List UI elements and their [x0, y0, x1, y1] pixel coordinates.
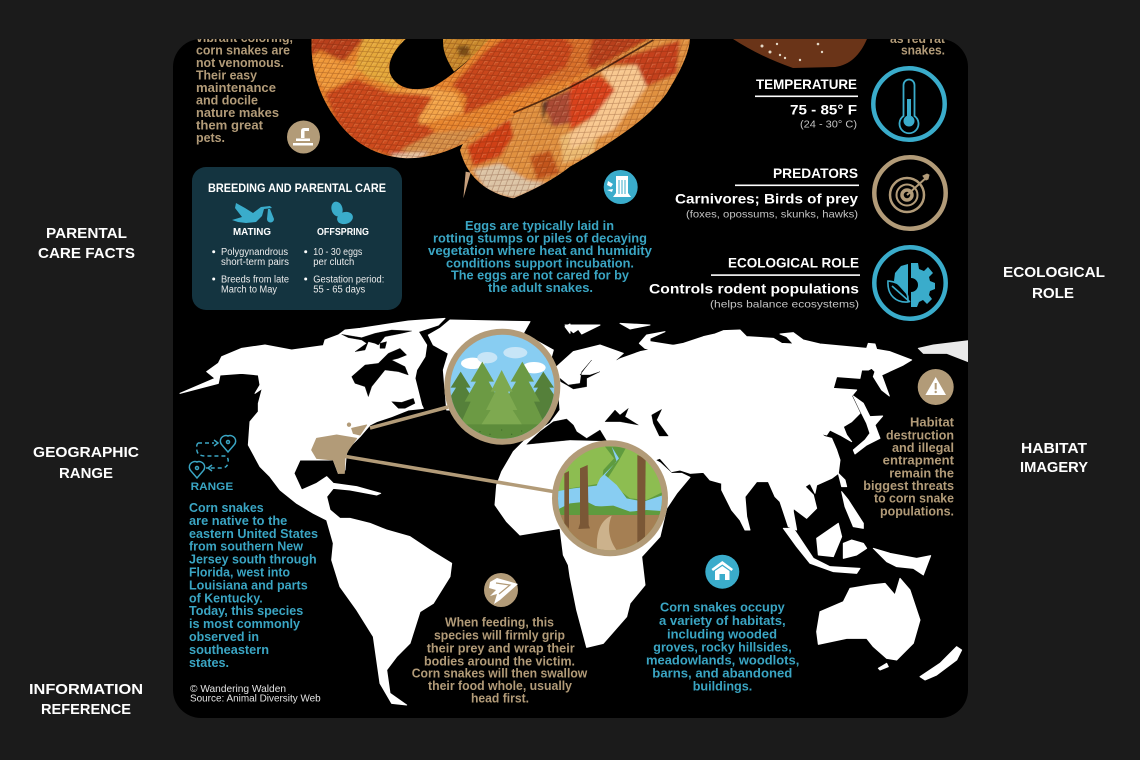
text block: feeding: When feeding, this [445, 615, 554, 630]
offspring bullet list: Gestation period: [313, 275, 384, 286]
text block: threats: populations. [880, 503, 954, 518]
text block: range description: observed in [189, 629, 259, 644]
text block: feeding [412, 615, 588, 706]
stat: temperature: (24 - 30° C) [800, 119, 857, 131]
stat: ecological role: Controls rodent populations [649, 280, 859, 296]
text block: range description: from southern New [189, 539, 304, 554]
stat: predators: PREDATORS [773, 165, 858, 181]
snake: tongue [463, 172, 471, 198]
connector lines from range to habitat circles [343, 407, 556, 492]
text block: range description [189, 500, 318, 670]
text block: habitats: barns, and abandoned [652, 665, 792, 680]
text block: range description: are native to the [189, 513, 287, 528]
sidebar label: parental care facts: CARE FACTS [38, 245, 135, 262]
text block: threats: entrapment [883, 453, 955, 468]
icon: eggs [331, 202, 353, 224]
text block: top right diet: snakes. [901, 42, 945, 58]
stat: predators: Carnivores; Birds of prey [675, 190, 858, 206]
mating bullet list [212, 247, 289, 296]
text block: range description: states. [189, 655, 229, 670]
text block: eggs: rotting stumps or piles of decaying [433, 231, 647, 246]
text block: feeding: their prey and wrap their [427, 641, 575, 656]
habitat circle: woodland river [550, 440, 670, 562]
icon: snake on basket [287, 120, 320, 154]
snake: lower body band [460, 39, 690, 198]
sidebar label: information reference: INFORMATION [29, 681, 143, 698]
text block: range description: Louisiana and parts [189, 577, 308, 592]
snake photo illustration [311, 39, 690, 198]
text block: pets description: pets. [196, 130, 225, 145]
stat: ecological role: ECOLOGICAL ROLE [728, 255, 859, 271]
sidebar label: habitat imagery [1020, 440, 1088, 476]
stat: predators [675, 157, 946, 229]
text block: eggs: Eggs are typically laid in [465, 218, 614, 233]
text block: top right diet: as red rat [890, 31, 946, 46]
text block: threats: to corn snake [874, 491, 954, 506]
map: highlighted native range [312, 423, 367, 473]
offspring bullet list [304, 247, 384, 296]
text block: range description: of Kentucky. [189, 590, 263, 605]
stat: ecological role [649, 247, 946, 319]
snake: tail section top right [733, 39, 867, 68]
text block: habitats: a variety of habitats, [659, 613, 786, 628]
text block: pets description: nature makes [196, 105, 279, 120]
icon: warning [918, 369, 954, 405]
text block: threats: remain the [889, 465, 954, 480]
icon: stork [232, 203, 274, 223]
world map [180, 318, 968, 705]
mating bullet list: Breeds from late [221, 275, 289, 286]
stat: ecological role: (helps balance ecosystems) [710, 298, 859, 310]
heading: range: RANGE [191, 481, 233, 493]
icon: house [705, 555, 739, 589]
icon: leaf and gear [874, 247, 946, 319]
icon: tree stump [604, 170, 638, 204]
text block: range description: southeastern [189, 642, 269, 657]
text block: eggs: The eggs are not cared for by [451, 268, 630, 282]
sidebar label: ecological role: ECOLOGICAL [1003, 264, 1105, 281]
text block: threats [863, 415, 955, 518]
offspring bullet list: 55 - 65 days [313, 285, 365, 296]
text block: range description: Corn snakes [189, 500, 264, 515]
habitat circle: forest [444, 328, 560, 445]
map: Eurasia, Africa and Oceania [495, 323, 968, 680]
text block: pets description [196, 30, 293, 145]
text block: habitats: groves, rocky hillsides, [653, 639, 792, 654]
column heading: offspring: OFFSPRING [317, 226, 369, 238]
credits [190, 684, 320, 704]
sidebar label: ecological role: ROLE [1032, 285, 1074, 302]
sidebar label: information reference: REFERENCE [41, 701, 131, 718]
text block: feeding: Corn snakes will then swallow [412, 666, 588, 681]
mating bullet list: Polygynandrous [221, 247, 288, 258]
text block: habitats: Corn snakes occupy [660, 600, 785, 615]
stat: predators: (foxes, opossums, skunks, hawks) [686, 208, 858, 220]
sidebar label: parental care facts: PARENTAL [46, 225, 127, 242]
text block: pets description: Their easy [196, 68, 258, 82]
text block: pets description: maintenance [196, 80, 276, 95]
stat: temperature: TEMPERATURE [756, 76, 857, 92]
text block: pets description: corn snakes are [196, 42, 290, 58]
text block: eggs: the adult snakes. [488, 280, 593, 295]
sidebar label: ecological role [1003, 264, 1105, 302]
text block: feeding: bodies around the victim. [424, 653, 575, 668]
snake: back coil [443, 39, 490, 72]
offspring bullet list: 10 - 30 eggs [313, 247, 362, 258]
stat: temperature [755, 68, 945, 140]
credits: Source: Animal Diversity Web [190, 693, 321, 705]
text block: pets description: vibrant coloring, [196, 30, 293, 45]
stat: temperature: 75 - 85° F [790, 101, 857, 117]
credits: © Wandering Walden [190, 683, 286, 695]
mating bullet list: March to May [221, 285, 277, 296]
icon: thermometer [873, 68, 945, 140]
text block: eggs: conditions support incubation. [446, 255, 634, 270]
icon: target [874, 157, 946, 229]
text block: threats: Habitat [910, 415, 955, 430]
text block: habitats: buildings. [693, 678, 752, 693]
text block: feeding: species will firmly grip [434, 627, 565, 642]
sidebar label: parental care facts [38, 225, 135, 262]
sidebar label: habitat imagery: IMAGERY [1020, 459, 1088, 476]
map: Americas and Greenland [180, 318, 570, 705]
text block: range description: is most commonly [189, 616, 301, 631]
text block: habitats [646, 600, 799, 693]
text block: habitats: meadowlands, woodlots, [646, 652, 799, 667]
sidebar label: geographic range: RANGE [59, 465, 113, 482]
text block: threats: and illegal [892, 440, 954, 455]
snake: shadow between bands [513, 40, 653, 113]
text block: feeding: their food whole, usually [428, 678, 573, 693]
icon: route range [189, 436, 236, 478]
text block: range description: Jersey south through [189, 552, 317, 567]
text block: feeding: head first. [471, 691, 529, 706]
panel: breeding and parental care [192, 167, 402, 310]
panel: main black card [173, 30, 968, 718]
text block: pets description: not venomous. [196, 55, 284, 70]
text block: eggs: vegetation where heat and humidity [428, 243, 653, 258]
mating bullet list: short-term pairs [221, 257, 289, 268]
panel heading: BREEDING AND PARENTAL CARE [208, 183, 386, 195]
offspring bullet list: per clutch [313, 257, 354, 268]
text block: range description: Today, this species [189, 603, 303, 618]
column heading: mating: MATING [233, 226, 271, 238]
text block: top right diet [890, 39, 945, 54]
sidebar label: information reference [29, 681, 143, 718]
icon: snake head [484, 573, 518, 607]
snake: upper body band [311, 39, 649, 158]
text block: pets description: them great [196, 118, 264, 132]
text block: habitats: including wooded [667, 626, 777, 641]
text block: range description: eastern United States [189, 526, 318, 541]
text block: pets description: and docile [196, 92, 258, 108]
text block: threats: destruction [886, 427, 954, 442]
sidebar label: geographic range: GEOGRAPHIC [33, 444, 139, 461]
text block: threats: biggest threats [863, 478, 954, 493]
text block: range description: Florida, west into [189, 564, 290, 580]
sidebar label: habitat imagery: HABITAT [1021, 440, 1087, 457]
sidebar label: geographic range [33, 444, 139, 482]
text block: eggs [428, 218, 653, 295]
